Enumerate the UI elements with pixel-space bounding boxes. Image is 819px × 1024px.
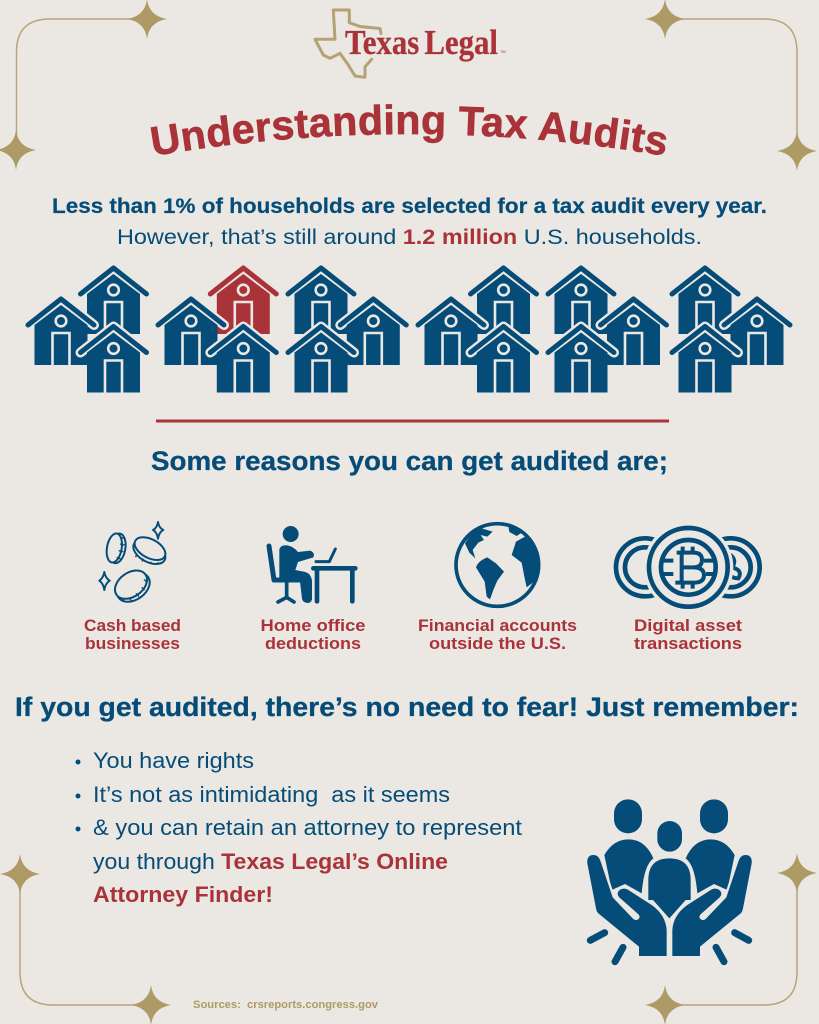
reason: financial accounts outside the U.S. bbox=[418, 524, 577, 653]
houses pictogram bbox=[28, 268, 790, 392]
icon: hands holding family bbox=[587, 799, 752, 962]
logo: Texas Legal bbox=[315, 10, 506, 77]
statistic: headline: Less than 1% of households are selected for a tax audit every year. bbox=[52, 195, 767, 218]
house cluster 3 bbox=[288, 268, 406, 392]
bullet: attorney: you through Texas Legal’s Online bbox=[93, 849, 448, 874]
reason: digital asset transactions bbox=[616, 525, 760, 653]
icon: bitcoin coins bbox=[616, 525, 760, 610]
title: Understanding Tax Audits bbox=[150, 104, 666, 155]
icon: Texas state outline bbox=[315, 10, 381, 77]
house cluster 1 bbox=[28, 268, 146, 392]
house cluster 2 with highlighted red house bbox=[158, 268, 276, 392]
reason: cash based businesses bbox=[84, 522, 181, 653]
icon: person working at desk bbox=[269, 526, 355, 603]
heading: if you get audited: If you get audited, there’s no need to fear! Just remember: bbox=[15, 692, 799, 722]
label: Cash based bbox=[84, 616, 181, 635]
house cluster 6 bbox=[672, 268, 790, 392]
label: outside the U.S. bbox=[429, 634, 566, 653]
reason: home office deductions bbox=[260, 526, 366, 653]
house cluster 5 bbox=[548, 268, 666, 392]
bullet: not intimidating: It’s not as intimidating as it seems bbox=[93, 782, 450, 807]
label: transactions bbox=[634, 634, 742, 653]
sources: Sources: crsreports.congress.gov bbox=[193, 999, 379, 1011]
icon: coins bbox=[99, 522, 169, 608]
house cluster 4 bbox=[418, 268, 536, 392]
label: Financial accounts bbox=[418, 616, 577, 635]
label: Home office bbox=[260, 616, 366, 635]
icon: globe bbox=[456, 524, 539, 606]
label: Digital asset bbox=[634, 616, 742, 635]
bullet: rights: You have rights bbox=[93, 748, 254, 773]
decorative frame: top right bbox=[645, 0, 817, 171]
decorative frame: bottom left bbox=[0, 854, 171, 1024]
decorative frame: top left bbox=[0, 0, 167, 170]
bullet: attorney: Attorney Finder! bbox=[93, 882, 273, 907]
bullet list bbox=[76, 748, 522, 907]
logo wordmark: Texas Legal bbox=[345, 23, 498, 62]
label: deductions bbox=[265, 634, 361, 653]
label: businesses bbox=[85, 634, 180, 653]
bullet: attorney bbox=[76, 815, 522, 907]
decorative frame: bottom right bbox=[645, 853, 817, 1024]
statistic: subline: However, that’s still around 1.2 million U.S. households. bbox=[117, 226, 702, 249]
heading: reasons: Some reasons you can get audited are; bbox=[151, 446, 668, 476]
trademark: TM bbox=[500, 49, 506, 54]
bullet: attorney: & you can retain an attorney to represent bbox=[93, 815, 522, 840]
